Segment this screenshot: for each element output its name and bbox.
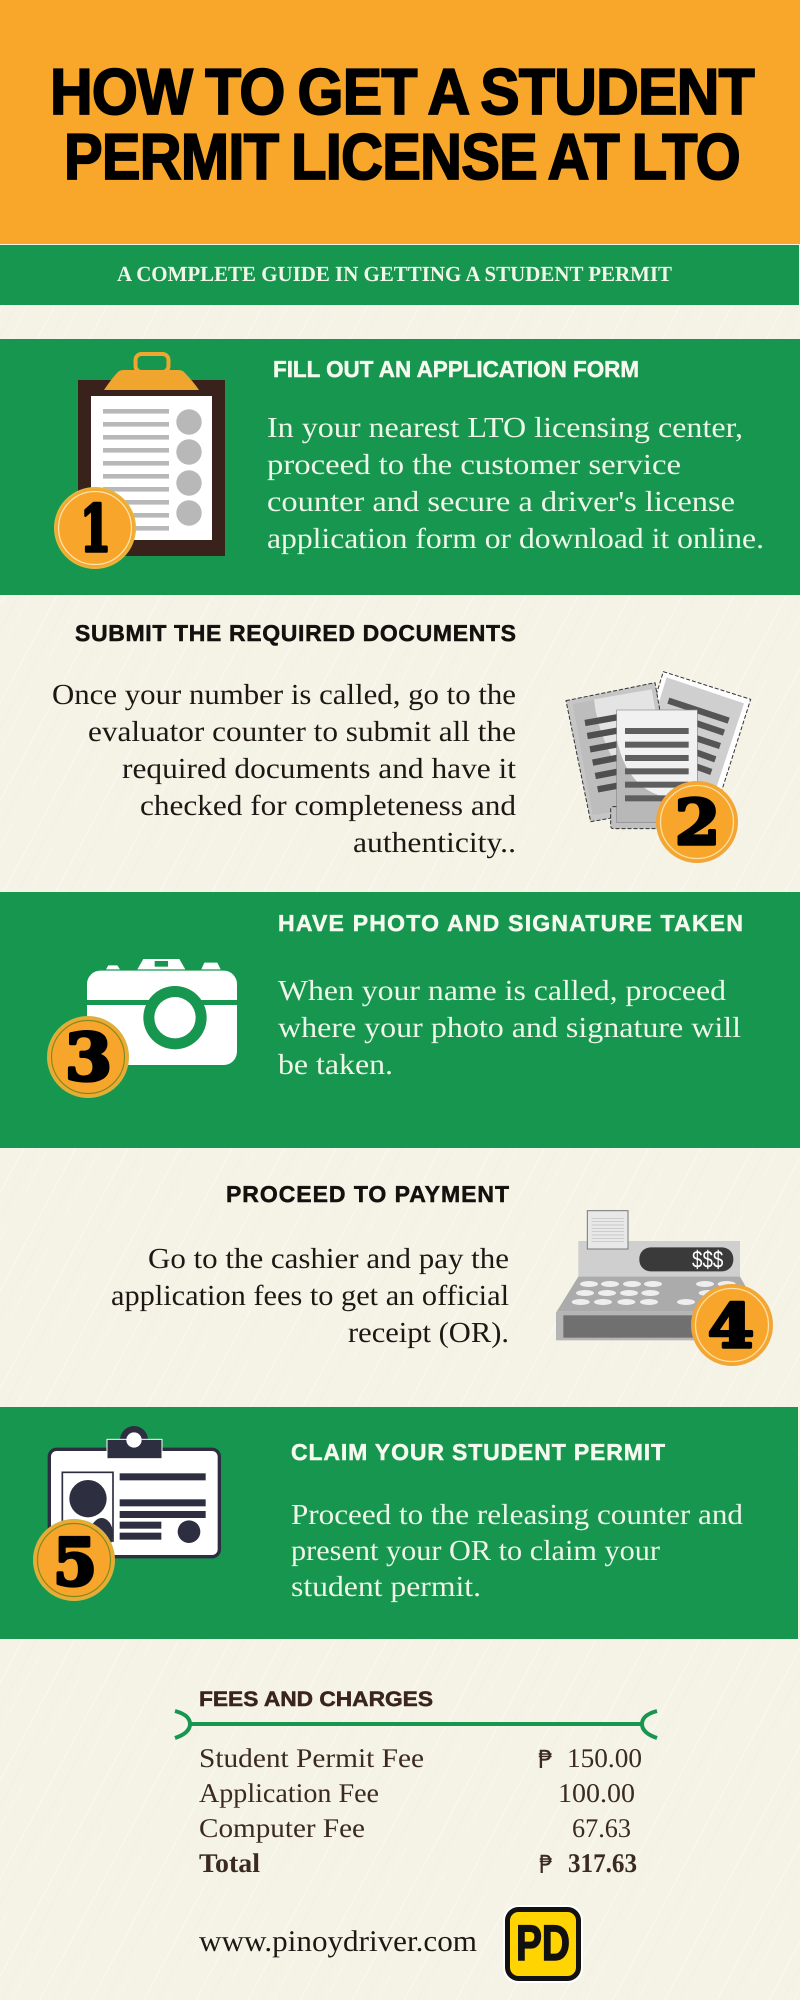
fees table: ₱	[538, 1745, 553, 1774]
icon: cash register	[556, 1211, 760, 1340]
fees table: Computer Fee	[199, 1813, 365, 1843]
step 2 description: checked for completeness and	[140, 790, 517, 822]
step 1 description: In your nearest LTO licensing center,	[267, 412, 743, 444]
step 2 description: evaluator counter to submit all the	[88, 716, 516, 748]
logo: PD	[503, 1905, 583, 1983]
badge: number 5	[34, 1520, 114, 1601]
step 5 description: student permit.	[291, 1571, 481, 1603]
step 3 description: where your photo and signature will	[278, 1012, 741, 1044]
icon: cash register: $$$	[692, 1246, 723, 1273]
step 3 description	[278, 975, 741, 1081]
badge: number 3: 3	[65, 1020, 112, 1096]
step 5 heading: CLAIM YOUR STUDENT PERMIT	[291, 1439, 665, 1465]
step 4 description: receipt (OR).	[348, 1317, 509, 1349]
fees heading: FEES AND CHARGES	[199, 1688, 433, 1711]
panel: step 4 proceed to payment	[111, 1181, 772, 1365]
step 4 description	[111, 1243, 509, 1349]
step 4 description: Go to the cashier and pay the	[148, 1243, 509, 1275]
panel: fees and charges	[175, 1688, 657, 1879]
badge: number 2	[657, 782, 737, 862]
fees table: 150.00	[567, 1743, 642, 1773]
fees table: 317.63	[568, 1848, 637, 1878]
step 1 description: proceed to the customer service	[267, 449, 681, 481]
step 1 description: counter and secure a driver's license	[267, 486, 735, 518]
step 1 heading: FILL OUT AN APPLICATION FORM	[273, 356, 639, 382]
title	[50, 55, 754, 193]
subtitle band	[0, 245, 799, 305]
badge: number 5: 5	[53, 1525, 97, 1601]
step 2 description	[52, 679, 517, 859]
icon: camera	[87, 959, 237, 1065]
step 5 description: present your OR to claim your	[291, 1535, 660, 1567]
badge: number 4	[692, 1285, 772, 1365]
badge: number 3	[48, 1017, 128, 1097]
step 2 heading: SUBMIT THE REQUIRED DOCUMENTS	[75, 620, 516, 646]
panel: step 3 have photo and signature taken	[0, 892, 800, 1148]
panel: step 5 claim your student permit	[0, 1407, 798, 1639]
header banner	[0, 0, 800, 244]
badge: number 1: 1	[80, 492, 111, 567]
fees table	[199, 1743, 642, 1879]
step 5 description	[291, 1499, 744, 1603]
panel: step 2 submit the required documents	[52, 620, 751, 862]
icon: clipboard	[78, 354, 225, 556]
step 5 description: Proceed to the releasing counter and	[291, 1499, 744, 1531]
panel: step 1 fill out an application form	[0, 339, 800, 595]
step 1 description: application form or download it online.	[267, 523, 764, 555]
step 4 description: application fees to get an official	[111, 1280, 509, 1312]
icon: documents	[566, 672, 751, 829]
subtitle: A COMPLETE GUIDE IN GETTING A STUDENT PERMIT	[117, 262, 673, 286]
website url: www.pinoydriver.com	[199, 1925, 477, 1958]
fees table: ₱	[539, 1850, 553, 1879]
badge: number 4: 4	[708, 1292, 754, 1362]
icon: id card	[49, 1426, 219, 1557]
step 3 description: be taken.	[278, 1049, 393, 1081]
step 2 description: required documents and have it	[122, 753, 516, 785]
fees table: Student Permit Fee	[199, 1743, 424, 1773]
step 3 heading: HAVE PHOTO AND SIGNATURE TAKEN	[278, 910, 743, 936]
step 2 description: Once your number is called, go to the	[52, 679, 516, 711]
fees table: 100.00	[558, 1778, 635, 1808]
step 3 description: When your name is called, proceed	[278, 975, 727, 1007]
fees table: 67.63	[572, 1813, 631, 1843]
fees table: Application Fee	[199, 1778, 379, 1808]
divider with bracket ends	[175, 1711, 657, 1738]
badge: number 2: 2	[675, 786, 720, 859]
step 4 heading: PROCEED TO PAYMENT	[226, 1181, 509, 1207]
logo: PD: PD	[516, 1915, 570, 1971]
step 2 description: authenticity..	[353, 827, 516, 859]
fees table: Total	[199, 1848, 261, 1878]
step 1 description	[267, 412, 764, 555]
badge: number 1	[55, 488, 135, 568]
